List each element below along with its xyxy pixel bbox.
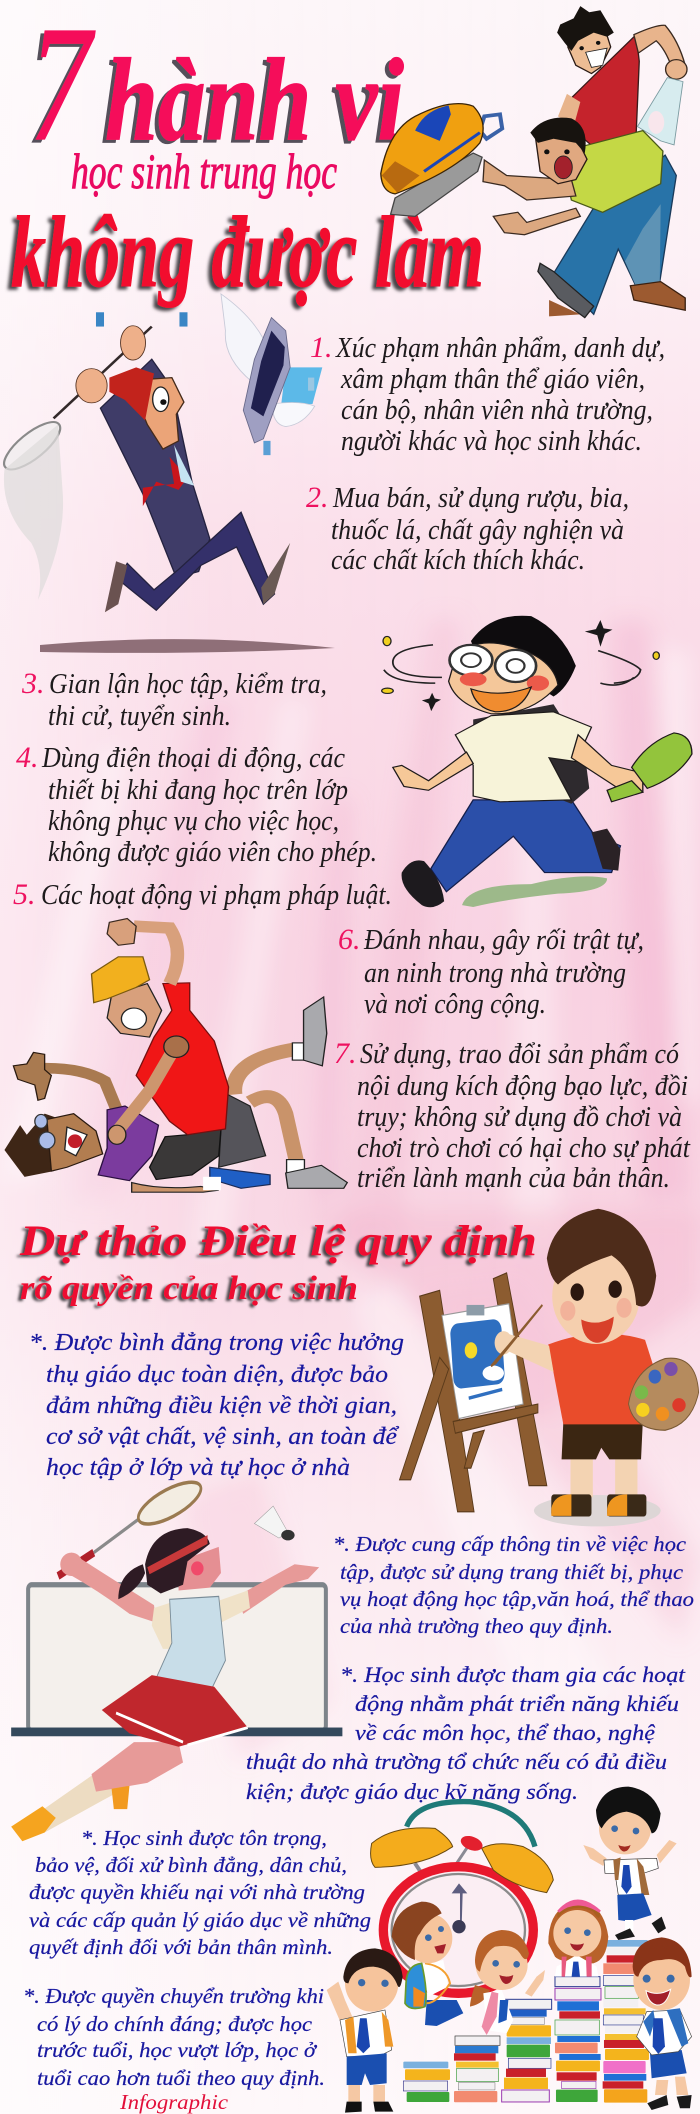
text: right 1: cơ sở vật chất, vệ sinh, an toàn để [46,1424,400,1450]
text: right 5: có lý do chính đáng; được học [37,2012,313,2036]
item 3: 3. [21,667,44,700]
illustration: dizzy drunk boy [382,616,692,907]
list items 6 and 7 [334,923,691,1194]
net [11,1585,342,1736]
item 2: 2. [306,481,328,514]
item 6: an ninh trong nhà trường [364,958,626,989]
easel [400,1273,547,1512]
text: right 4: được quyền khiếu nại với nhà trường [29,1880,365,1904]
title: không được làm: không được làm [11,196,484,309]
palette [629,1358,699,1430]
list items 3, 4 and 5 [13,667,392,911]
title [11,0,484,309]
text: right 1: học tập ở lớp và tự học ở nhà [46,1455,350,1481]
item 6: 6. [338,923,360,956]
item 4: thiết bị khi đang học trên lớp [48,775,348,806]
title: học sinh trung học: học sinh trung học [71,143,337,199]
heading: rights of students [19,1218,537,1307]
boy top right [583,1787,677,1940]
text: right 1 [29,1330,404,1481]
item 2: các chất kích thích khác. [331,545,585,576]
girl [11,1528,319,1841]
text: right 4: và các cấp quản lý giáo dục về những [29,1908,371,1932]
text: right 5: trước tuổi, học vượt lớp, học ở [37,2038,318,2062]
phone with wings [96,294,322,455]
text: right 4: bảo vệ, đối xử bình đẳng, dân chủ, [35,1853,347,1877]
shuttlecock [254,1506,295,1540]
illustration: boy stealing backpack from another boy [381,6,687,318]
item 7: 7. [334,1037,356,1070]
racket [58,1474,205,1576]
text: right 2: của nhà trường theo quy định. [340,1614,613,1638]
illustration: two students fighting [4,919,347,1192]
item 1: 1. [310,331,332,364]
text: right 5: *. Được quyền chuyển trường khi [23,1984,324,2008]
text: right 3: thuật do nhà trường tổ chức nếu có đủ điều [246,1749,667,1774]
net [0,327,152,600]
text: right 1: đảm những điều kiện về thời gian, [46,1393,397,1419]
item 4: không được giáo viên cho phép. [48,837,377,868]
item 7: trụy; không sử dụng đồ chơi và [357,1102,682,1133]
illustration: businessman with net chasing flying phone [0,294,322,612]
ground shadow [534,1495,661,1526]
text: right 3: động nhằm phát triển năng khiếu [355,1691,679,1716]
clock [371,1802,553,1993]
item 7: Sử dụng, trao đổi sản phẩm có [360,1039,679,1070]
illustration: boy painting at easel [400,1209,699,1526]
item 4: Dùng điện thoại di động, các [41,743,346,774]
item 3: Gian lận học tập, kiểm tra, [49,669,327,700]
illustration: girl playing badminton [11,1474,342,1841]
text: right 2 [333,1532,694,1638]
text: right 2: *. Được cung cấp thông tin về việc học [333,1532,687,1556]
text: right 5: tuổi cao hơn tuổi theo quy định. [37,2066,325,2090]
item 1: người khác và học sinh khác. [341,426,642,457]
text: right 2: vụ hoạt động học tập,văn hoá, thể thao [340,1587,694,1611]
item 1: xâm phạm thân thể giáo viên, [340,364,645,395]
boy left [327,1948,403,2113]
item 4: không phục vụ cho việc học, [48,806,339,837]
girl with pigtail [470,1930,545,2035]
bottle [607,733,692,802]
boy bottom right [633,1937,692,2110]
text: right 3: kiện; được giáo dục kỹ năng sống. [246,1779,578,1804]
top boy [557,6,687,151]
top boy [92,919,229,1192]
item 1: Xúc phạm nhân phẩm, danh dự, [335,333,665,364]
text: right 4: *. Học sinh được tôn trọng, [81,1826,327,1850]
dizzy marks [382,620,659,711]
text: right 3: *. Học sinh được tham gia các hoạt [340,1662,686,1687]
illustration: alarm clock, books and students [327,1787,692,2113]
heading: rights of students: rõ quyền của học sinh [20,1270,358,1307]
text: right 4 [29,1826,371,1959]
list items 1 and 2 [306,331,665,576]
item 5: Các hoạt động vi phạm pháp luật. [41,880,392,911]
legs [402,800,620,907]
backpack [381,104,502,216]
boy with backpack [392,1902,463,2026]
text: right 4: quyết định đối với bản thân mình. [29,1935,333,1959]
bottom boy legs [210,997,347,1188]
item 7: triển lành mạnh của bản thân. [357,1163,670,1194]
item 2: Mua bán, sử dụng rượu, bia, [332,483,629,514]
man [76,326,290,612]
item 2 [306,481,629,576]
text: right 3 [246,1662,686,1804]
ground shadow under businessman [40,639,335,653]
canvas [442,1304,523,1419]
text: right 5 [23,1984,325,2090]
head [449,616,576,714]
item 3: thi cử, tuyển sinh. [48,701,231,732]
item 4: 4. [16,741,38,774]
item 6: và nơi công cộng. [364,989,546,1020]
bottom boy [483,118,685,318]
text: right 1: *. Được bình đẳng trong việc hưởng [29,1330,404,1356]
item 7 [334,1037,691,1194]
body and backpack [393,704,643,804]
text: right 1: thụ giáo dục toàn diện, được bảo [46,1362,388,1388]
item 3 [21,667,327,732]
text: right 2: tập, được sử dụng trang thiết bị, phục [340,1560,684,1584]
title: 7 hành vi: hành vi [105,34,404,165]
item 6 [338,923,644,1020]
item 1: cán bộ, nhân viên nhà trường, [341,395,653,426]
heading: rights of students: Dự thảo Điều lệ quy định [19,1218,537,1265]
item 1 [310,331,665,457]
ground [462,876,607,907]
item 4 [16,741,377,868]
item 2: thuốc lá, chất gây nghiện và [331,515,624,546]
boy [491,1209,656,1517]
item 5: 5. [13,878,36,911]
book stacks [403,1940,649,2103]
footer label: Infographic: Infographic [119,2090,229,2114]
item 6: Đánh nhau, gây rối trật tự, [363,925,644,956]
title: 7 hành vi [29,0,404,175]
bottom boy torso and head [4,1052,158,1181]
girl with headband [548,1901,608,1977]
text: right 3: về các môn học, thể thao, nghệ [355,1720,655,1745]
